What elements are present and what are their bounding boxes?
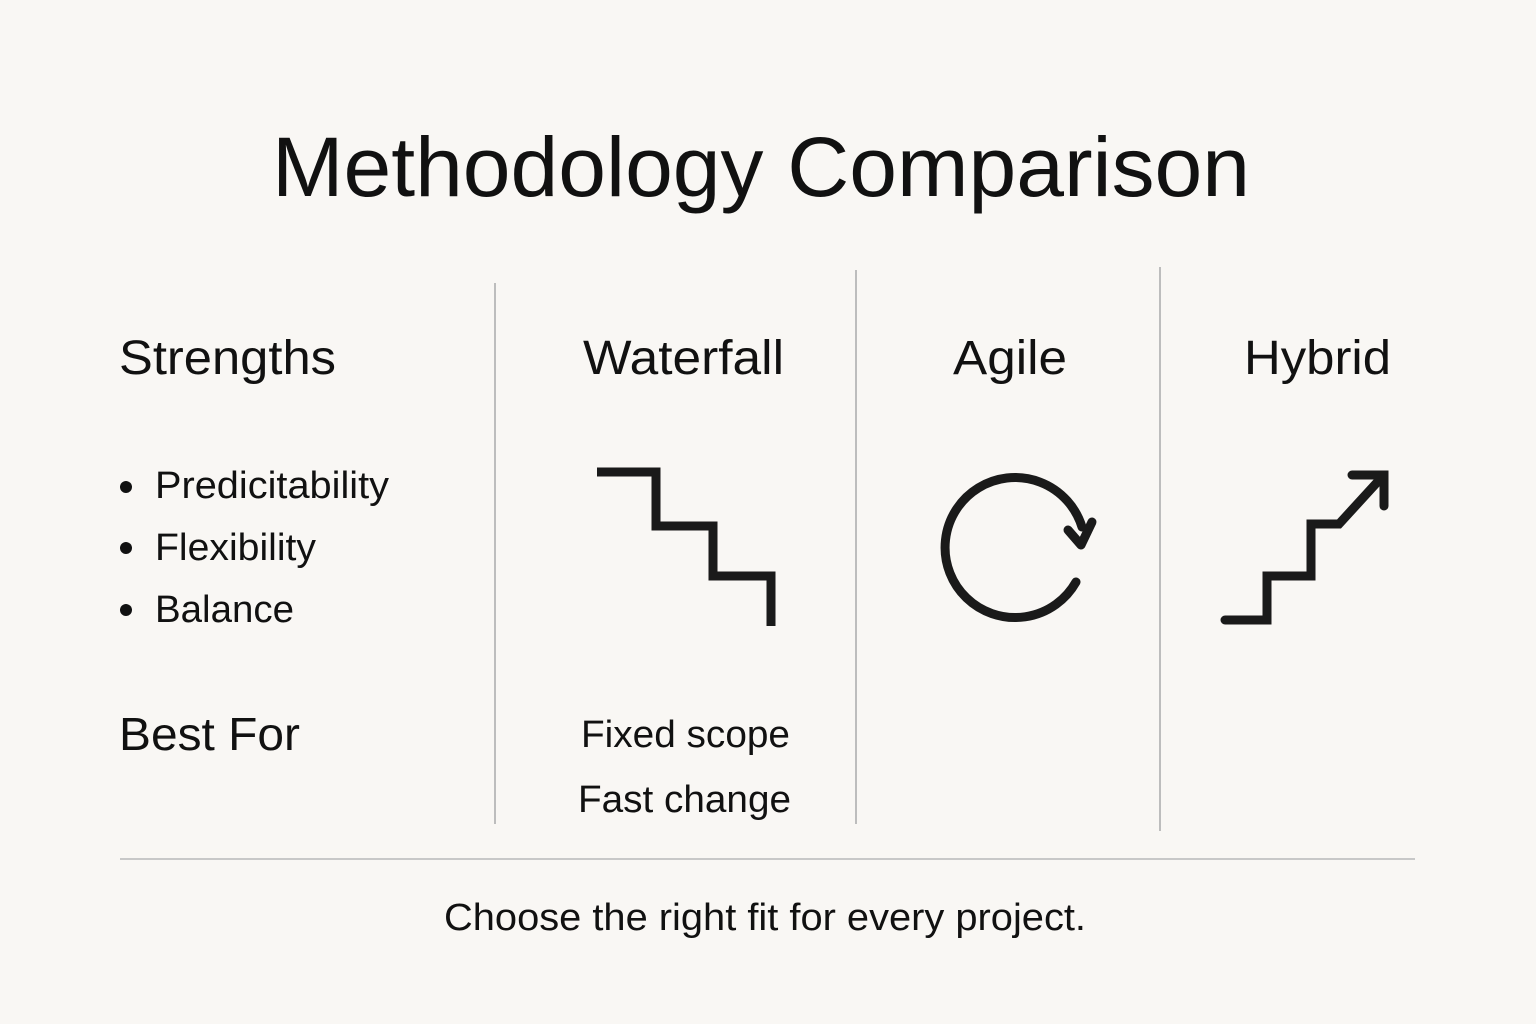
- icon: cycle arrow: [945, 478, 1092, 618]
- footer tagline: Choose the right fit for every project.: [444, 897, 1086, 939]
- bullet list: Flexibility: [155, 527, 316, 569]
- heading: strengths: Strengths: [119, 332, 336, 385]
- best for text: [578, 714, 791, 821]
- icon: waterfall stairs: [597, 472, 771, 626]
- bullet list: Balance: [155, 589, 294, 631]
- best for text: Fixed scope: [581, 714, 790, 756]
- bullet list: Predicitability: [155, 465, 389, 507]
- icon: rising steps arrow: [1225, 475, 1384, 620]
- panel: agile: [945, 332, 1092, 618]
- heading: waterfall: Waterfall: [583, 332, 784, 385]
- heading: agile: Agile: [953, 332, 1067, 385]
- panel: waterfall: [578, 332, 791, 821]
- heading: hybrid: Hybrid: [1244, 332, 1391, 385]
- panel: hybrid: [1225, 332, 1391, 620]
- panel: strengths: [119, 332, 389, 760]
- title: Methodology Comparison: [272, 120, 1250, 214]
- bullet list: [120, 465, 389, 631]
- heading: best for: Best For: [119, 708, 300, 760]
- best for text: Fast change: [578, 779, 791, 821]
